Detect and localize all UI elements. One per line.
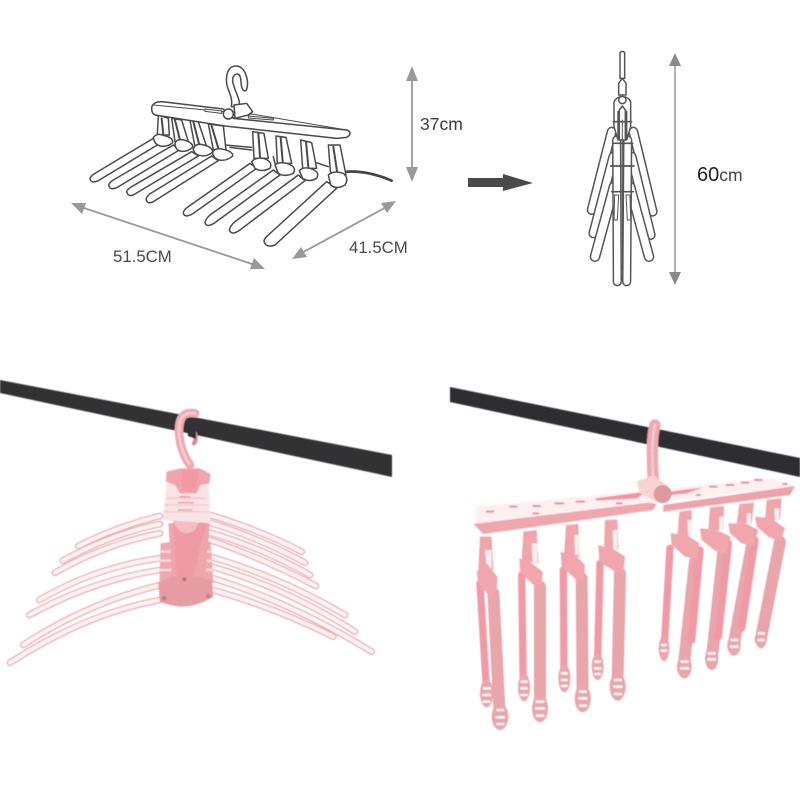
hook <box>652 425 655 480</box>
rail over hook <box>663 430 693 452</box>
icon: hanger line drawing <box>90 66 392 246</box>
label: 60cm: 60cm <box>697 164 743 186</box>
pivot <box>223 109 233 119</box>
panel: folded hanger line drawing with height <box>592 51 743 285</box>
bar front strip <box>473 503 657 534</box>
arrow: height dimension 60cm <box>669 53 681 285</box>
hanger hook <box>226 66 247 107</box>
arrow: depth dimension 41.5CM <box>292 201 396 259</box>
rail <box>0 380 392 477</box>
rail <box>450 387 800 477</box>
hanger support lines <box>223 127 328 167</box>
clip stems <box>478 498 782 570</box>
hanger photo <box>10 413 372 663</box>
pivot <box>637 475 668 503</box>
bar top surface <box>475 478 793 524</box>
rail passing through hook <box>186 418 196 439</box>
hanger arms <box>90 138 337 246</box>
hanger photo <box>473 425 795 730</box>
swivel top <box>166 468 211 493</box>
center body <box>158 520 213 606</box>
loop tips <box>480 628 767 730</box>
label: 37cm: 37cm <box>420 114 463 134</box>
long strips <box>493 542 780 720</box>
short strips <box>480 540 755 693</box>
hanger clip stems <box>157 115 346 175</box>
panel: open hanger photo on rail <box>450 387 800 730</box>
loop slots <box>483 633 764 724</box>
clip windows <box>485 508 779 570</box>
right arms <box>210 515 372 652</box>
arrow: width dimension 51.5CM <box>71 203 265 269</box>
white folded bars <box>163 480 211 523</box>
bar holes <box>487 480 787 513</box>
clip bodies <box>477 517 785 597</box>
panel: folded hanger photo on rail <box>0 380 392 663</box>
cord behind <box>347 171 392 181</box>
panel: unfolded hanger line drawing with dimensions <box>71 66 463 269</box>
side ridges <box>159 542 175 583</box>
label: 51.5CM: 51.5CM <box>113 247 172 266</box>
label: 41.5CM: 41.5CM <box>349 238 408 257</box>
arrow: height dimension 37cm <box>406 66 418 182</box>
arrow: folding direction <box>468 174 533 191</box>
hanger bar <box>152 102 350 138</box>
hook <box>179 413 195 465</box>
hanger clip bodies <box>153 134 347 187</box>
icon: folded hanger line drawing <box>592 51 653 282</box>
left arms <box>10 516 160 663</box>
